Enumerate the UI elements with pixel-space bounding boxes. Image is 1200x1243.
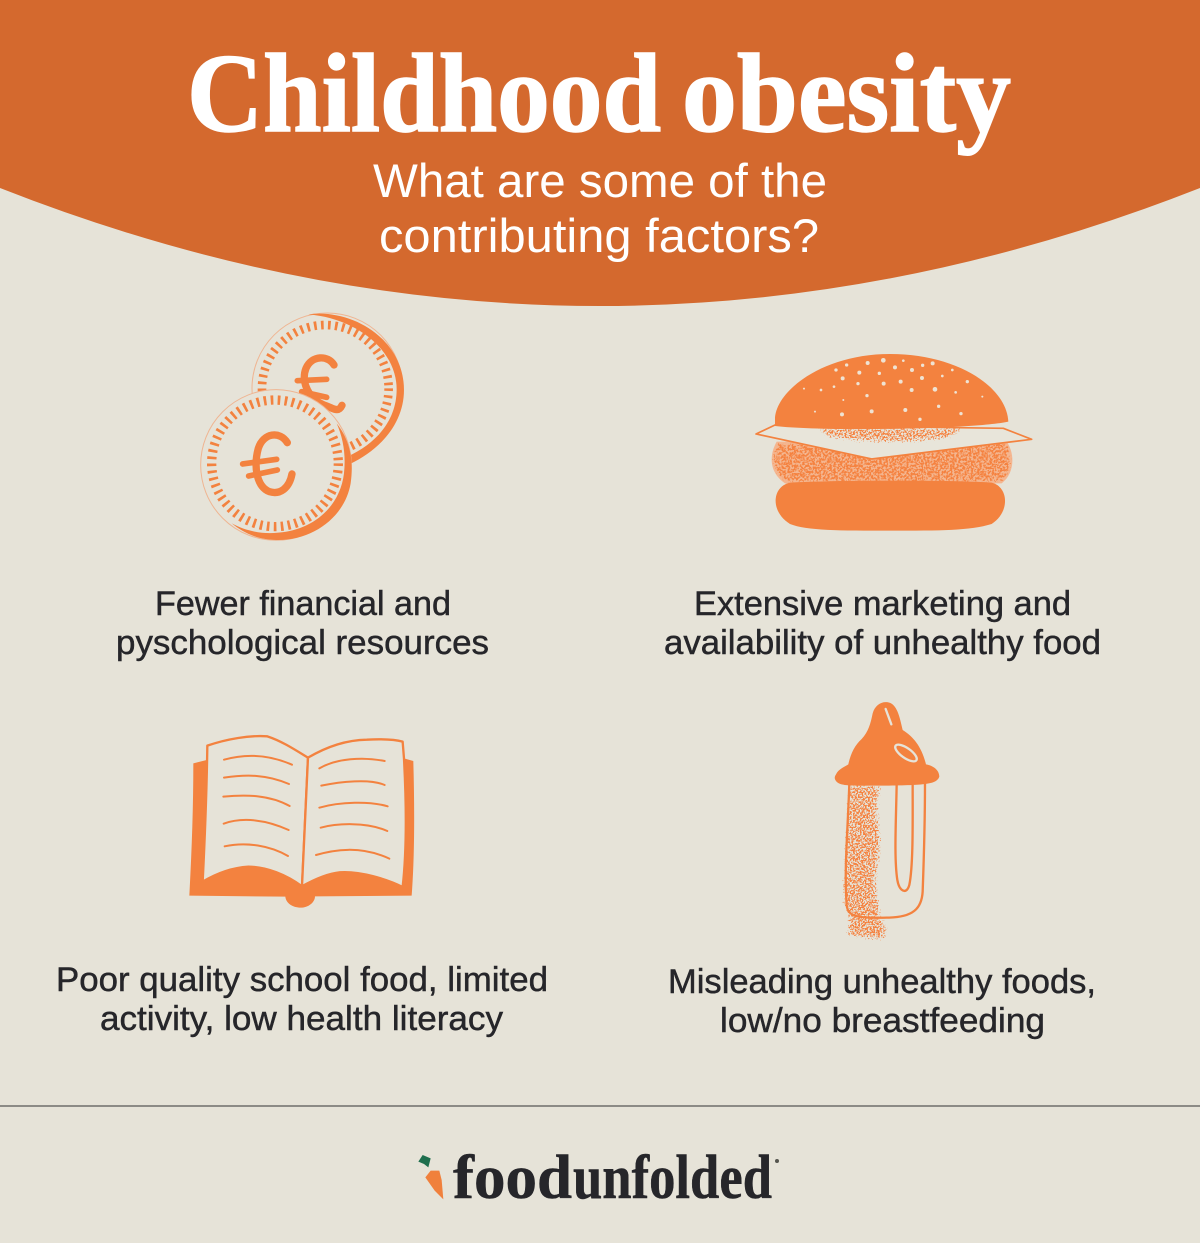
header banner	[0, 0, 1200, 306]
logo: foodunfolded	[418, 1144, 779, 1212]
top bun	[775, 354, 1008, 429]
caption: school food: activity, low health literacy	[100, 1000, 503, 1038]
cheese slice	[756, 425, 1032, 459]
caption: misleading foods: Misleading unhealthy foods,	[668, 963, 1096, 1001]
caption: school food	[56, 961, 548, 1038]
milk speckle	[840, 782, 892, 943]
caption: misleading foods	[668, 963, 1096, 1040]
icon: euro coins	[201, 313, 404, 540]
icon: baby bottle	[835, 702, 939, 943]
left page	[203, 736, 308, 886]
caption: school food: Poor quality school food, limited	[56, 961, 548, 999]
caption: marketing: availability of unhealthy food	[664, 624, 1101, 662]
caption: financial resources	[116, 585, 489, 662]
book cover	[189, 758, 414, 908]
bottom bun	[776, 481, 1005, 531]
wordmark: food	[453, 1144, 572, 1212]
back coin	[252, 313, 404, 464]
subtitle	[373, 154, 827, 262]
patty	[772, 442, 1012, 483]
title: obesity	[682, 32, 1011, 156]
caption: misleading foods: low/no breastfeeding	[720, 1002, 1045, 1040]
caption: marketing: Extensive marketing and	[694, 585, 1071, 623]
subtitle: contributing factors?	[379, 209, 819, 262]
nipple cap	[835, 702, 939, 786]
wordmark	[453, 1144, 772, 1212]
wordmark: unfolded	[573, 1144, 772, 1212]
sesame seeds	[803, 358, 983, 421]
caption: financial resources: pyschological resources	[116, 624, 489, 662]
text lines	[223, 756, 389, 859]
bottle body	[846, 783, 925, 918]
front coin	[201, 390, 352, 540]
icon: open book	[189, 736, 414, 908]
icon: burger	[756, 354, 1032, 531]
icon: carrot	[418, 1155, 443, 1199]
right page	[302, 739, 406, 887]
title: Childhood	[187, 32, 661, 156]
title	[187, 32, 1011, 156]
registered mark	[775, 1159, 779, 1163]
caption: marketing	[664, 585, 1101, 662]
cap highlights	[886, 709, 919, 764]
caption: financial resources: Fewer financial and	[155, 585, 451, 623]
subtitle: What are some of the	[373, 154, 827, 207]
